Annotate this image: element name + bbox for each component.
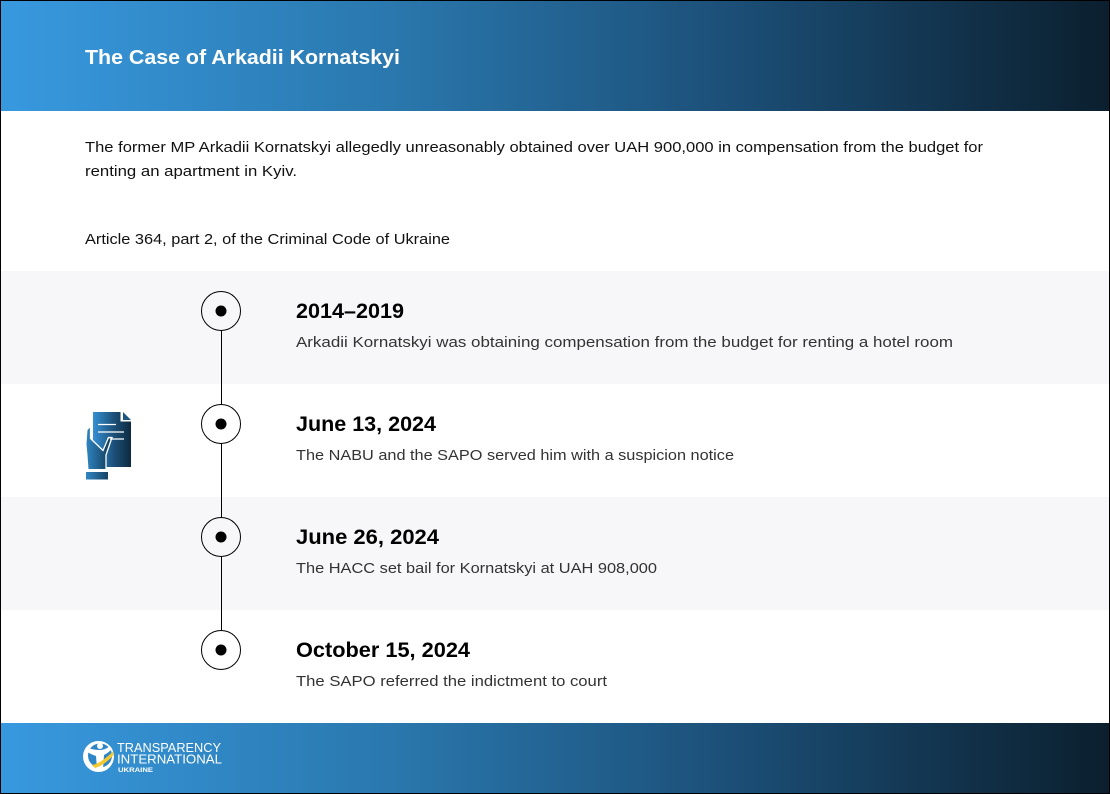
date: October 15, 2024 [296, 639, 470, 662]
document sheet with folded corner [93, 412, 131, 467]
date: June 26, 2024 [296, 526, 439, 549]
marker [202, 518, 240, 556]
description: Arkadii Kornatskyi was obtaining compensation from the budget for renting a hotel room [296, 334, 953, 351]
logo wordmark: UKRAINE [118, 767, 154, 774]
footer band [0, 723, 1110, 794]
timeline event: June 26, 2024 [202, 518, 657, 577]
marker [202, 630, 240, 670]
cuff [86, 472, 108, 480]
icon: hand holding document [86, 412, 131, 480]
case summary: renting an apartment in Kyiv. [85, 163, 297, 180]
logo wordmark: INTERNATIONAL [117, 752, 222, 766]
description: The HACC set bail for Kornatskyi at UAH 908,000 [296, 560, 657, 577]
logo emblem [83, 741, 114, 772]
timeline event: October 15, 2024 [202, 630, 608, 690]
timeline event: 2014–2019 [202, 292, 953, 351]
logo wordmark [117, 740, 222, 774]
timeline event: June 13, 2024 [202, 404, 734, 464]
date: 2014–2019 [296, 300, 404, 323]
case summary [85, 139, 983, 180]
marker [202, 292, 240, 330]
logo: Transparency International Ukraine [83, 740, 222, 774]
timeline axis [221, 311, 222, 650]
hand [86, 427, 110, 469]
header band [0, 0, 1110, 111]
timeline row backgrounds [0, 271, 1110, 610]
logo wordmark: TRANSPARENCY [117, 740, 221, 755]
date: June 13, 2024 [296, 413, 436, 436]
description: The NABU and the SAPO served him with a suspicion notice [296, 447, 734, 464]
legal article: Article 364, part 2, of the Criminal Code of Ukraine [85, 231, 450, 248]
case summary: The former MP Arkadii Kornatskyi allegedly unreasonably obtained over UAH 900,000 in compensation from the budget for [85, 139, 983, 156]
title: The Case of Arkadii Kornatskyi [85, 47, 400, 69]
description: The SAPO referred the indictment to court [296, 673, 608, 690]
marker [202, 404, 240, 444]
